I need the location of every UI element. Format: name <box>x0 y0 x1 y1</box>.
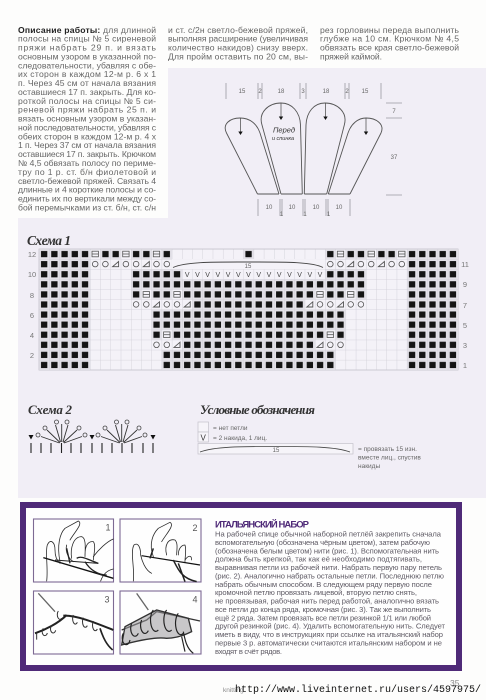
legend: 15 together: вместе лиц., спустив <box>358 454 421 462</box>
text block: description column 2: Для пройм оставить по 20 см, вы- <box>168 51 308 61</box>
merged cell with arc: 15 stitches: 15 <box>245 264 252 270</box>
text block: description column 1: оставшиеся 17 п. закрыть. Для ко- <box>18 87 156 97</box>
text block: description column 1: Описание работы: для длинной <box>18 25 156 35</box>
dimensions: top <box>226 83 381 99</box>
row numbers: left <box>28 250 36 360</box>
legend: V stitch <box>198 432 267 442</box>
label: front and back: и спинка <box>272 136 294 142</box>
dimensions: top: 3 <box>301 89 305 95</box>
V stitches row 10: VVVVVVVVVVVVVV <box>185 272 323 279</box>
text block: description column 1: обеих сторон в каждом 12-м р. 4 х <box>18 131 157 141</box>
row numbers: left: 2 <box>30 351 34 360</box>
text block: description column 3 <box>320 25 460 61</box>
chart: crochet scheme 2 <box>28 420 156 453</box>
illustration: step 1: 1 <box>105 522 110 532</box>
illustration: step 4: 4 <box>192 595 197 605</box>
outline: short strip right <box>328 118 382 194</box>
dimensions: top: 15 <box>362 89 369 95</box>
illustration: step 3: 3 <box>104 595 109 605</box>
row numbers: left: 8 <box>30 291 34 300</box>
legend: no stitch <box>198 422 248 432</box>
dimensions: top: 2 <box>258 89 262 95</box>
text block: Italian cast-on instructions: ещё 2 ряда. Затем провязать все петли резинкой 1/1 или любой <box>215 613 431 622</box>
dimensions: right <box>386 103 402 195</box>
dimensions: top: 15 <box>239 89 246 95</box>
outline: tall strip right <box>304 103 345 194</box>
row numbers: left: 6 <box>30 311 34 320</box>
dimensions: top: 18 <box>278 89 285 95</box>
text block: Italian cast-on instructions: кромочной петлю провязать лицевой, вторую петлю снять, <box>215 588 417 597</box>
heading: scheme 2: Схема 2 <box>28 402 72 417</box>
purl-bar stitches <box>92 251 405 338</box>
legend: 15 together: 15 <box>273 448 280 454</box>
text block: Italian cast-on instructions: набрать обычным способом. В следующем ряду первую после <box>215 580 432 589</box>
dimensions: bottom: 10 <box>266 205 273 211</box>
yarn-over stitches <box>92 261 405 348</box>
outline: short strip left <box>225 118 279 194</box>
row numbers: right: 1 <box>463 361 467 370</box>
row numbers: right: 5 <box>463 321 467 330</box>
black stitch cells <box>39 249 458 370</box>
legend: no stitch: = нет петли <box>213 425 248 432</box>
dimensions: bottom: 1 <box>327 212 331 218</box>
text block: description column 1: длинные и 4 короткие полосы и со- <box>18 185 156 195</box>
text block: description column 1: п. Через 45 см от начала вязания <box>18 78 156 88</box>
text block: Italian cast-on instructions: должна быть крепкой, так как её необходимо подтягивать, <box>215 555 422 564</box>
illustration: step 4 <box>120 591 201 654</box>
text block: description column 1: оставшиеся 17 п. закрыть. Крючком <box>18 149 156 159</box>
text block: description column 2 <box>168 25 308 61</box>
text block: description column 1: пряжи набрать 29 п. и вязать <box>18 43 157 53</box>
row numbers: left: 10 <box>28 270 36 279</box>
text block: Italian cast-on instructions: иметь в виду, что в инструкциях при ссылке на итальянский набор <box>215 630 443 639</box>
grid background <box>39 249 458 370</box>
text block: description column 1: их сторон в каждом 12-м р. 6 х 1 <box>18 69 156 79</box>
legend: V stitch: V <box>201 434 207 442</box>
row numbers: left: 12 <box>28 250 36 259</box>
text block: description column 1: светло-бежевой пряжей. Связать 4 <box>18 176 156 186</box>
text block: description column 1: роткой полосы на спицы № 5 си- <box>18 96 156 106</box>
text block: Italian cast-on instructions <box>215 530 446 656</box>
chart: garment schematic with fan of strips <box>225 83 402 218</box>
chart: knitting scheme 1 grid <box>39 249 458 370</box>
text block: description column 3: обвязать все края светло-бежевой <box>320 43 459 53</box>
merged cell with arc: 15 stitches <box>172 259 325 270</box>
base line of strips <box>258 193 350 195</box>
decrease stitches <box>113 262 384 347</box>
legend: 15 together: накиды <box>358 463 380 470</box>
text block: description column 1 <box>18 25 157 212</box>
text block: description column 2: выполняя расширение (увеличивая <box>168 34 308 44</box>
text block: description column 1: вязать основным узором в указан- <box>18 114 156 124</box>
text block: description column 1: ной последовательности, убавляя с <box>18 122 157 132</box>
footer: magazine name: knitting <box>223 687 244 694</box>
text block: Italian cast-on instructions: вспомогательную (обозначена чёрным цветом), затем рабочую <box>215 538 430 547</box>
row numbers: right: 7 <box>463 301 467 310</box>
text block: description column 3: пряжей каймой. <box>320 51 382 61</box>
label: front and back <box>272 126 295 142</box>
legend: 15 together: = провязать 15 изн. <box>358 446 417 453</box>
dimensions: bottom: 1 <box>303 212 307 218</box>
base stitches <box>31 443 153 453</box>
dimensions: bottom: 1 <box>280 212 284 218</box>
text block: Italian cast-on instructions: (обозначена белым цветом) нити (рис. 1). Вспомогательная нить <box>215 546 439 555</box>
dimensions: top: 18 <box>323 89 330 95</box>
outline: tall strip left <box>261 103 302 194</box>
row numbers: right: 3 <box>463 341 467 350</box>
row numbers: right: 11 <box>461 260 469 269</box>
footer: watermark URL: http://www.liveinternet.ru/users/4597975/ <box>235 684 481 696</box>
heading: legend: Условные обозначения <box>200 402 315 417</box>
illustration: step 1 <box>34 519 114 582</box>
arrows on strips <box>238 103 368 135</box>
panel: lavender background <box>18 68 486 498</box>
text block: description column 1: следовательности, убавляя с обе- <box>18 60 156 70</box>
text block: Italian cast-on instructions: не провязывая, рабочая нить перед работой, аналогично вязать <box>215 596 439 606</box>
triangles <box>28 435 156 440</box>
heading: scheme 1: Схема 1 <box>27 233 71 248</box>
text block: description column 1: тру по 1 р. ст. б/н фиолетовой и <box>18 167 156 177</box>
dimensions: top: 2 <box>345 89 349 95</box>
illustration: step 2: 2 <box>192 523 197 533</box>
illustration: step 3 <box>34 591 114 654</box>
legend: 15 together <box>198 444 421 470</box>
text block: description column 1: реневой пряжи набрать 25 п. и <box>18 105 156 115</box>
text block: Italian cast-on instructions: первые 3 р. автоматически считаются итальянским набором и не <box>215 638 442 647</box>
text block: description column 3: глубже на 10 см. Крючком № 4,5 <box>320 34 459 44</box>
text block: description column 1: основным узором в указанной по- <box>18 51 156 61</box>
text block: description column 1: № 4,5 обвязать полосу по периме- <box>18 158 156 168</box>
fan 2 <box>96 420 147 443</box>
text block: Italian cast-on instructions: другой резинкой (рис. 4). Удалить вспомогательную нить. Следует <box>215 622 446 631</box>
panel: Italian cast-on <box>23 505 459 668</box>
row numbers: right: 9 <box>463 280 467 289</box>
text block: description column 1: полосы на спицы № 5 сиреневой <box>18 34 156 44</box>
legend: V stitch: = 2 накида, 1 лиц. <box>213 435 267 442</box>
dimensions: bottom: 10 <box>336 205 343 211</box>
text block: description column 1: 1 п. Через 37 см от начала вязания <box>18 140 156 150</box>
row numbers: left: 4 <box>30 331 34 340</box>
dimensions: bottom: 10 <box>289 205 296 211</box>
text block: Italian cast-on instructions: все петли до конца ряда, кромочная (рис. 3). Так же выполнить <box>215 605 431 614</box>
text block: Italian cast-on instructions: выравнивая петли из рабочей нити. Набрать первую пару петель <box>215 563 442 572</box>
dimensions: bottom <box>258 199 350 218</box>
text block: description column 3: рез горловины переда выполнить <box>320 25 460 35</box>
footer: page number: 35 <box>450 678 460 688</box>
legend <box>198 422 421 470</box>
text block: description column 1: единить их по вертикали между со- <box>18 194 156 204</box>
text block: description column 2: и ст. с/2н светло-бежевой пряжей, <box>168 25 308 35</box>
dimensions: bottom: 10 <box>313 205 320 211</box>
illustration: step 2 <box>120 519 201 582</box>
dimensions: right: 37 <box>391 155 398 161</box>
text block: description column 1: бой перемычками из ст. б/н, ст. с/н <box>18 202 156 212</box>
row numbers: right <box>461 260 469 370</box>
label: front and back: Перед <box>273 126 295 134</box>
text block: Italian cast-on instructions: входят в счёт рядов. <box>215 647 282 656</box>
dimensions: right: 7 <box>392 109 396 115</box>
text block: Italian cast-on instructions: На рабочей спице обычной наборной петлёй закрепить сначала <box>215 530 442 538</box>
heading: Italian cast-on: ИТАЛЬЯНСКИЙ НАБОР <box>215 518 310 530</box>
text block: Italian cast-on instructions: (рис. 2). Аналогично набрать остальные петли. Последнюю петлю <box>215 571 444 580</box>
fan 1 <box>36 420 87 443</box>
text block: description column 2: количество накидов) снизу вверх. <box>168 43 308 53</box>
